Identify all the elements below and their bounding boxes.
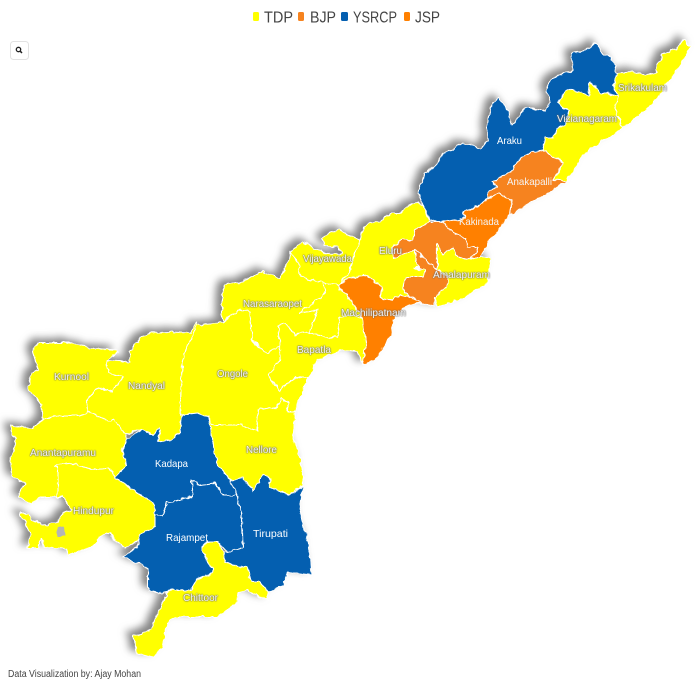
district: Tirupati xyxy=(223,475,312,592)
label: Vizianagaram: Vizianagaram xyxy=(557,113,617,125)
label: Narasaraopet: Narasaraopet xyxy=(243,298,302,310)
district: Rajampet xyxy=(123,480,243,594)
district: Guntur xyxy=(300,283,362,338)
district: Vizianagaram and Visakhapatnam xyxy=(543,82,623,181)
district: Kadapa xyxy=(115,413,237,515)
label: Bapatla: Bapatla xyxy=(297,344,331,356)
district: Kurnool xyxy=(28,343,123,420)
label: Ongole: Ongole xyxy=(217,368,248,380)
label: Machilipatnam: Machilipatnam xyxy=(341,307,406,319)
label: Vijayawada: Vijayawada xyxy=(303,253,352,265)
district: Narasaraopet xyxy=(222,252,325,353)
credit line: Data Visualization by: Ajay Mohan xyxy=(8,669,141,680)
legend item: BJP xyxy=(298,10,336,26)
legend xyxy=(253,10,440,26)
district: Anakapalli xyxy=(488,150,567,215)
label: Chittoor: Chittoor xyxy=(183,592,218,604)
legend item: TDP xyxy=(253,10,293,26)
legend item: YSRCP: YSRCP xyxy=(353,10,397,26)
label: Tirupati: Tirupati xyxy=(253,528,288,540)
district: Narsapuram xyxy=(403,250,448,307)
district: Eluru xyxy=(338,202,430,300)
icon: search button xyxy=(10,42,28,60)
legend item: TDP: TDP xyxy=(264,10,293,26)
district: Srikakulam xyxy=(613,40,690,128)
district: Araku xyxy=(418,42,618,222)
label: Anantapuramu: Anantapuramu xyxy=(30,447,96,459)
district: Anantapuramu xyxy=(10,412,127,505)
label: Rajampet: Rajampet xyxy=(166,532,208,544)
label: Hindupur: Hindupur xyxy=(73,505,114,517)
legend item: JSP: JSP xyxy=(415,10,440,26)
label: Nandyal: Nandyal xyxy=(128,380,165,392)
district: Vijayawada xyxy=(290,230,360,285)
district: Hindupur xyxy=(20,463,155,555)
label: Nellore: Nellore xyxy=(246,444,277,456)
label: Kurnool: Kurnool xyxy=(54,371,89,383)
legend item: BJP: BJP xyxy=(310,10,336,26)
label: Srikakulam: Srikakulam xyxy=(618,82,667,94)
legend item: JSP xyxy=(404,10,440,26)
label: Araku: Araku xyxy=(497,135,522,147)
label: Anakapalli: Anakapalli xyxy=(507,176,552,188)
label: Eluru: Eluru xyxy=(379,245,402,257)
small enclosed notch in Hindupur xyxy=(57,527,65,536)
label: Amalapuram: Amalapuram xyxy=(433,269,490,281)
district: Nandyal xyxy=(87,322,197,442)
district: Bapatla xyxy=(268,315,366,392)
legend item: YSRCP xyxy=(341,10,397,26)
label: Kadapa: Kadapa xyxy=(155,458,188,470)
label: Kakinada: Kakinada xyxy=(459,216,499,228)
district: Nellore xyxy=(208,398,303,495)
district: Kakinada xyxy=(443,193,512,260)
map labels xyxy=(30,82,667,604)
district: Machilipatnam xyxy=(338,275,423,365)
district: Chittoor xyxy=(133,542,268,657)
district: Amalapuram xyxy=(435,243,490,307)
district: Ongole xyxy=(180,310,308,430)
district: Rajahmundry xyxy=(392,222,477,270)
